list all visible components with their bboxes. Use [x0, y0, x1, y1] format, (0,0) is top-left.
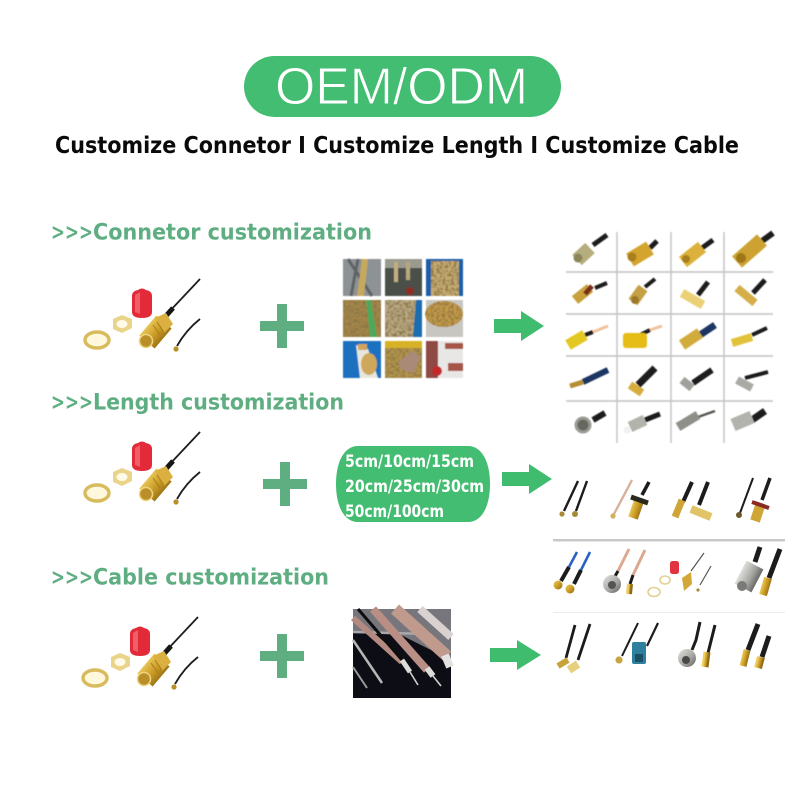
length row 3: 50cm/100cm — [345, 502, 444, 521]
subtitle: Customize Connetor I Customize Length I Customize Cable — [55, 133, 739, 159]
faint divider — [553, 612, 785, 613]
coax cable photo — [353, 609, 451, 698]
photo 9 packaging — [426, 341, 463, 378]
heading: connector customization: >>> — [51, 220, 93, 246]
assemblies row 1 — [559, 478, 770, 521]
photo 2 machine — [385, 259, 422, 296]
plus 2 — [263, 462, 307, 506]
row divider — [553, 539, 785, 541]
photo 8 gold tray — [385, 341, 422, 378]
arrow 2 — [502, 464, 552, 494]
length options pill — [336, 446, 490, 522]
factory photo mosaic — [343, 259, 463, 378]
heading: length customization: >>> — [51, 390, 93, 416]
connector type catalog grid — [566, 232, 773, 443]
photo 1 workshop — [343, 259, 381, 296]
plus 1 — [260, 304, 304, 348]
catalog row 2 — [575, 279, 765, 305]
connector kit 1 — [85, 279, 200, 352]
photo 3 gravel blue — [426, 259, 463, 296]
connector kit 3 — [83, 617, 198, 690]
heading: length customization: Length customization — [93, 390, 344, 416]
photo 5 gravel pale — [385, 300, 422, 337]
heading: cable customization: Cable customization — [93, 566, 329, 590]
cable assemblies photo — [553, 478, 785, 670]
arrow 1 — [494, 311, 544, 341]
connector kit 2 — [85, 432, 200, 505]
heading: connector customization: Connetor customization — [93, 220, 372, 246]
heading: cable customization: >>> — [51, 566, 93, 590]
title pill — [244, 56, 561, 117]
catalog row 3 — [568, 325, 767, 348]
photo 6 gravel pile — [425, 300, 463, 337]
length row 2: 20cm/25cm/30cm — [345, 477, 484, 496]
catalog row 4 — [570, 368, 768, 393]
title text: OEM/ODM — [275, 58, 528, 116]
assemblies row 2 — [554, 547, 780, 596]
arrow 3 — [490, 640, 541, 670]
photo 4 gravel green — [343, 300, 381, 337]
assemblies row 3 — [558, 622, 769, 670]
photo 7 blue crate — [343, 341, 381, 378]
plus 3 — [260, 634, 304, 678]
length row 1: 5cm/10cm/15cm — [345, 452, 474, 471]
catalog row 1 — [574, 233, 773, 263]
catalog row 5 — [576, 411, 765, 434]
